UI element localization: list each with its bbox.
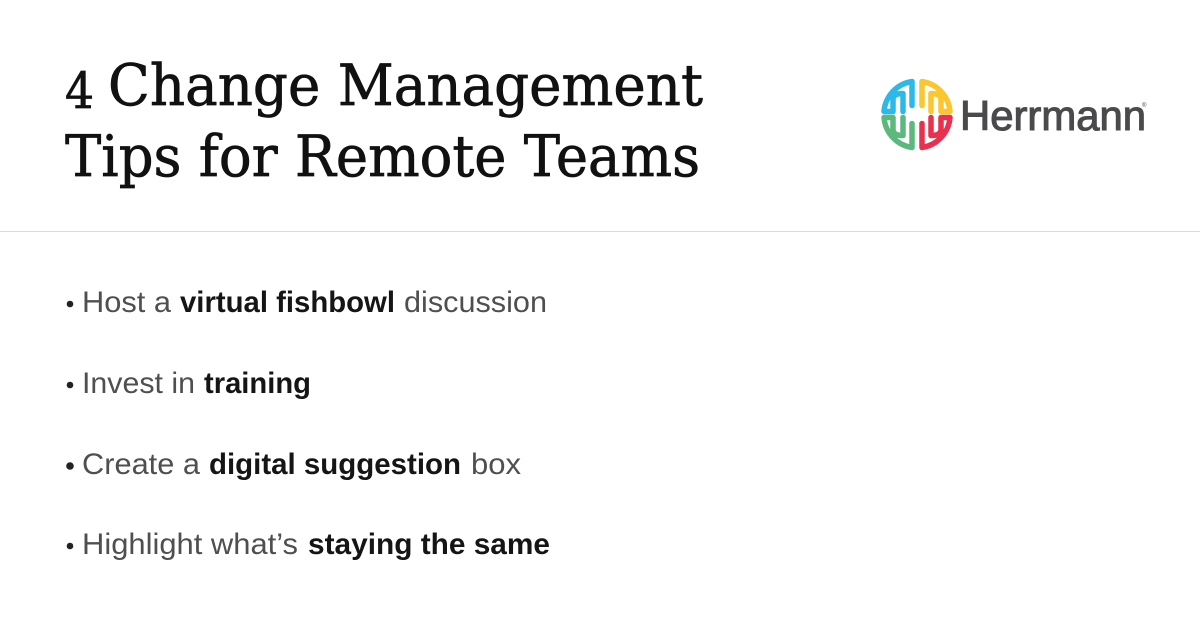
bullet 3: box [471, 448, 521, 481]
bullet 4: staying the same [308, 528, 550, 561]
bullet list [66, 286, 550, 561]
title: Tips for Remote Teams [65, 124, 700, 190]
bullet 1: discussion [404, 286, 547, 319]
bullet 1: virtual fishbowl [180, 286, 395, 319]
bullet 1 [67, 286, 547, 319]
registered mark: ® [1142, 102, 1147, 109]
bullet 2 [67, 367, 311, 400]
logo: Herrmann [884, 82, 1147, 148]
bullet 2: training [204, 367, 311, 400]
bullet 4 [67, 528, 550, 561]
bullet 3: Create a [82, 448, 200, 481]
bullet 4: Highlight what’s [82, 528, 298, 561]
wordmark: Herrmann [960, 92, 1146, 139]
title [65, 53, 703, 190]
icon: four-colour Celtic knot [884, 82, 950, 148]
bullet 3 [66, 448, 521, 481]
title: 4 [65, 62, 94, 120]
bullet 1: Host a [82, 286, 171, 319]
bullet 3: digital suggestion [209, 448, 461, 481]
bullet 2: Invest in [82, 367, 195, 400]
title: Change Management [108, 53, 703, 119]
